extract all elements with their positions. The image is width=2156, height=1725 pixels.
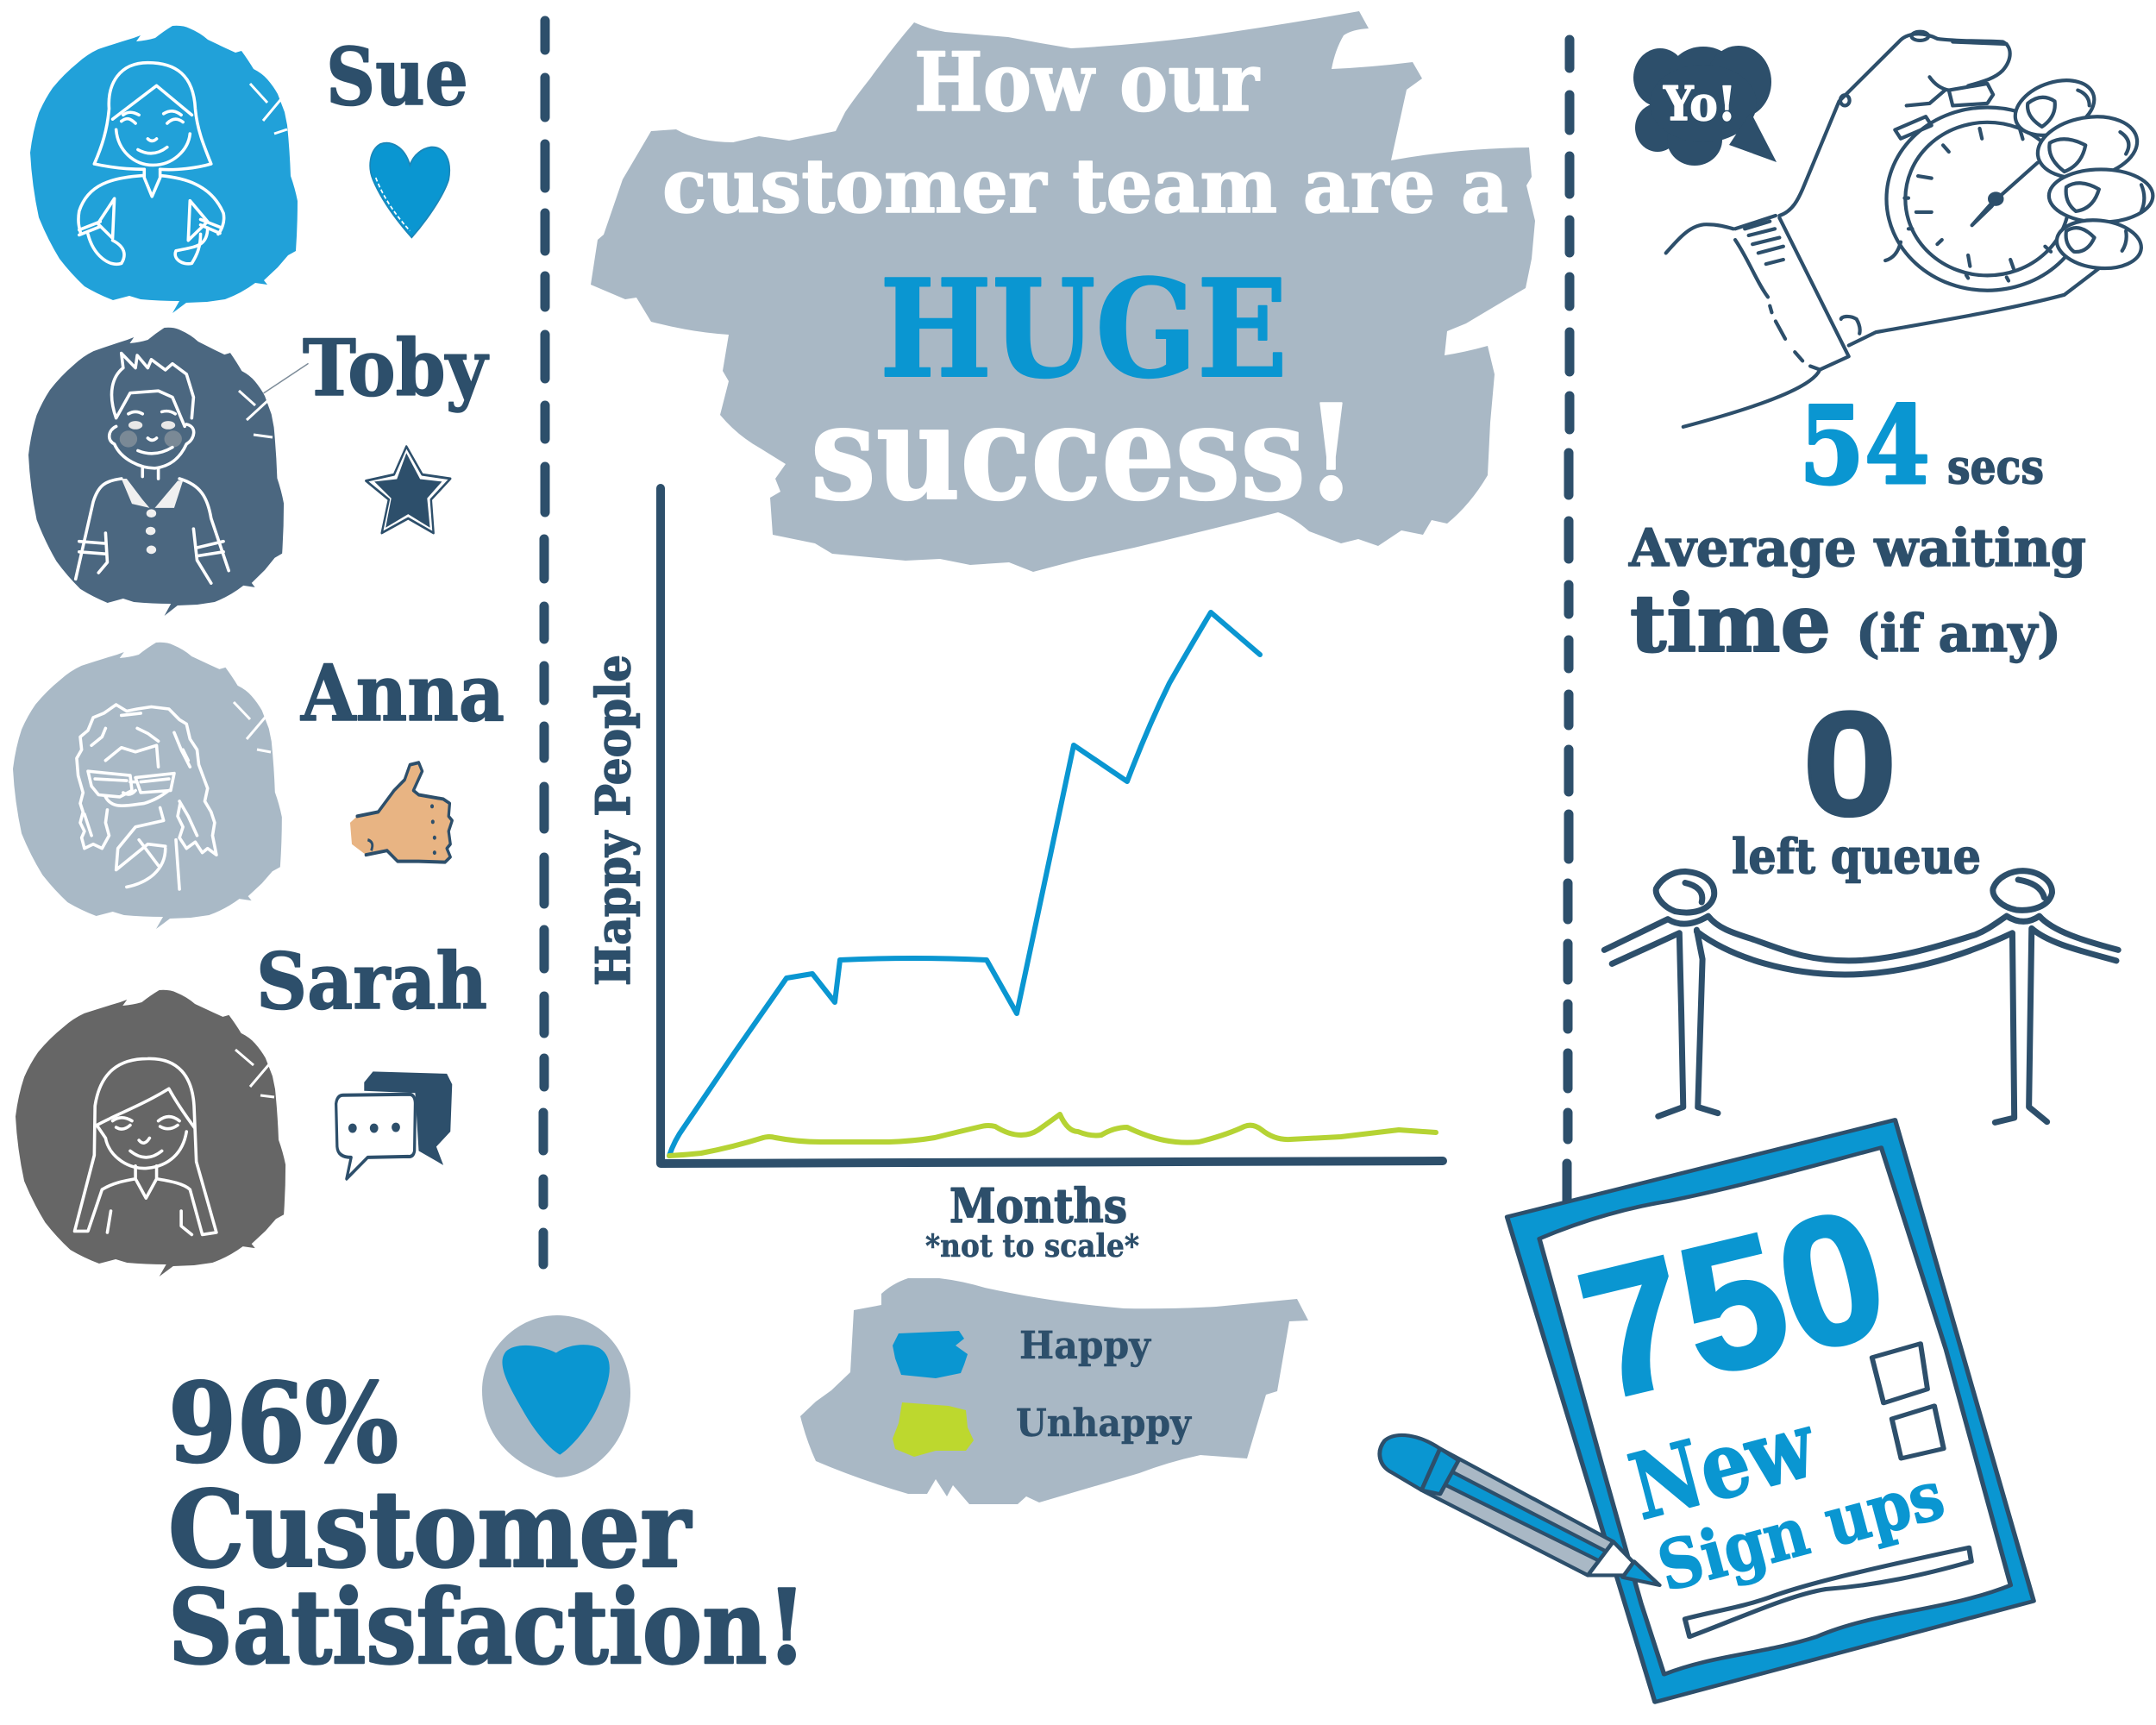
blob scratch [250, 84, 287, 134]
stat: 54: 54 [1799, 383, 1930, 509]
name: Sue: Sue [326, 30, 468, 123]
icon: pencil [1380, 1435, 1659, 1585]
portrait: Sarah [74, 1058, 216, 1234]
chart axes [661, 488, 1443, 1164]
blob: Sarah [16, 990, 285, 1276]
chart legend [800, 1278, 1308, 1504]
text: Satisfaction: Satisfaction! [168, 1567, 806, 1687]
title success: success! [811, 375, 1357, 530]
panel: waiting time [1628, 32, 2153, 670]
icon: heart [370, 143, 449, 237]
legend label: unhappy: Unhappy [1016, 1402, 1192, 1446]
panel: satisfaction [168, 1315, 806, 1687]
name: Toby: Toby [303, 323, 489, 414]
title line 1: How our [914, 35, 1260, 130]
panel: Sarah profile [16, 936, 487, 1276]
heart badge [482, 1315, 630, 1477]
text: Sign ups: Sign ups [1650, 1456, 1952, 1607]
portrait: Sue [78, 63, 224, 264]
bubble text: Yo! [1663, 76, 1736, 131]
stopwatch [1886, 107, 2088, 291]
series: happy [669, 612, 1260, 1156]
text: if any: (if any) [1856, 604, 2061, 664]
x axis label: Months [950, 1178, 1127, 1233]
icon: rope barrier [1604, 871, 2118, 1122]
blob scratch [235, 1050, 274, 1097]
series: unhappy [669, 1114, 1436, 1156]
icon: thumbs up [350, 762, 452, 862]
stat: 96%: 96% [168, 1359, 398, 1487]
legend brush background [800, 1278, 1308, 1504]
clipboard frame [1507, 1120, 2034, 1702]
panel: Anna profile [13, 643, 505, 929]
legend label: happy: Happy [1019, 1324, 1151, 1368]
text: Customer: Customer [168, 1467, 693, 1591]
blob scratch [234, 702, 271, 752]
text: left queue: left queue [1732, 828, 1981, 884]
text: time: time [1630, 577, 1831, 670]
speech bubble [1633, 46, 1777, 166]
name: Anna: Anna [300, 648, 505, 739]
icon: hand with stopwatch [1666, 32, 2153, 427]
stat: 750: 750 [1563, 1170, 1904, 1439]
legend swatch: unhappy [893, 1402, 974, 1457]
scale note: *not to scale* [925, 1228, 1139, 1264]
panel: Sue profile [30, 26, 468, 313]
icon: star [366, 447, 450, 533]
text: New: New [1620, 1389, 1827, 1540]
blob: Sue [30, 26, 298, 313]
panel: sign ups clipboard [1380, 1120, 2034, 1702]
panel: queue [1604, 681, 2118, 1122]
stat: 0: 0 [1802, 681, 1897, 847]
name: Sarah: Sarah [256, 936, 487, 1027]
connector hairline [264, 364, 308, 393]
legend swatch: happy [893, 1331, 968, 1378]
portrait: Toby [76, 354, 229, 583]
divider: left dashed line [543, 21, 545, 1264]
divider: right dashed line [1567, 40, 1570, 1203]
blob scratch [239, 391, 273, 437]
panel: title [591, 11, 1535, 572]
line chart [586, 488, 1443, 1264]
title HUGE: HUGE [880, 250, 1288, 408]
fingers [2010, 72, 2153, 272]
blob: Anna [13, 643, 282, 929]
y axis label: Happy People [586, 655, 641, 986]
text: secs: secs [1947, 439, 2044, 494]
panel: Toby profile [28, 323, 489, 616]
text: Average waiting: Average waiting [1628, 518, 2086, 579]
checkboxes [1685, 1344, 1971, 1637]
title brush background [591, 11, 1535, 572]
icon: chat bubbles [336, 1071, 452, 1179]
blob: Toby [28, 328, 284, 616]
portrait: Anna [77, 705, 216, 889]
title line 2: customer team are a [662, 143, 1508, 230]
